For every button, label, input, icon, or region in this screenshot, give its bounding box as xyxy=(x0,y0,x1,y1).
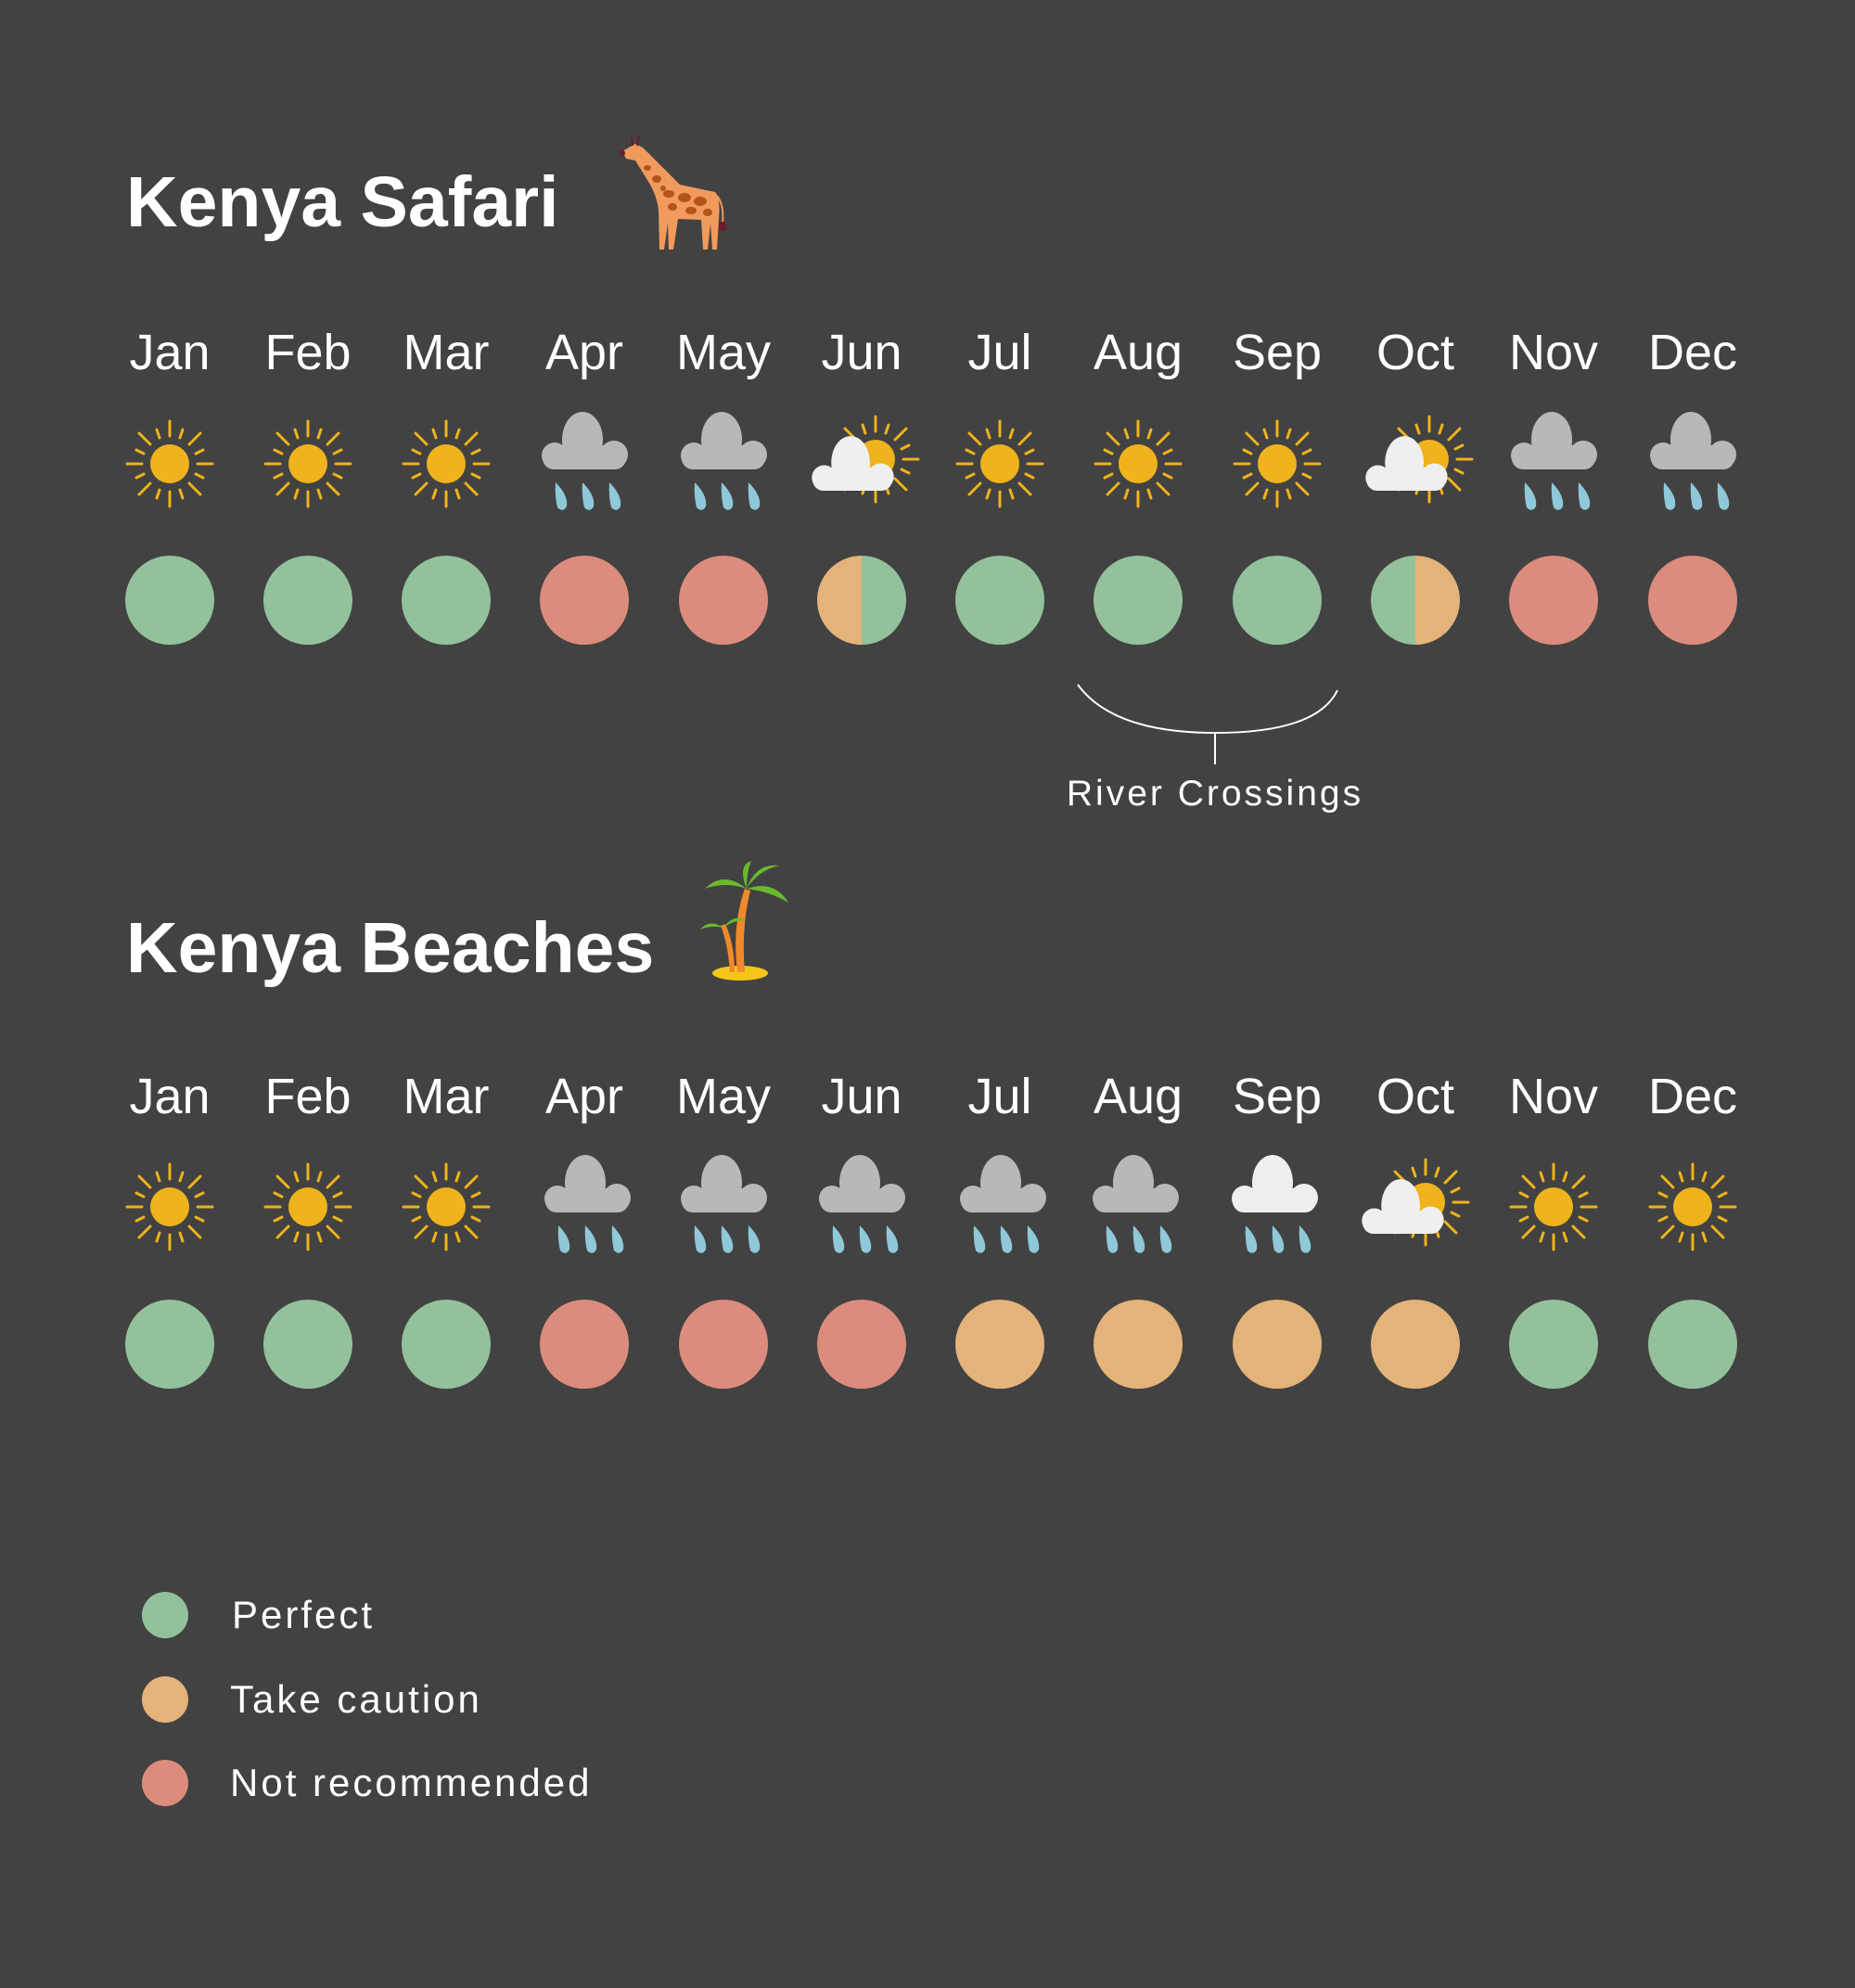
safari month labels: Aug xyxy=(1094,325,1183,380)
beaches month labels xyxy=(129,1069,1737,1124)
beaches month labels: Nov xyxy=(1509,1069,1598,1124)
icon: giraffe xyxy=(620,135,726,250)
beaches weather icons xyxy=(127,1155,1735,1253)
title: Kenya Safari: Kenya Safari xyxy=(126,162,559,242)
beaches month labels: Sep xyxy=(1233,1069,1322,1124)
safari month labels: Nov xyxy=(1509,325,1598,380)
safari month labels: Apr xyxy=(545,325,623,380)
safari month labels: Mar xyxy=(403,325,490,380)
beaches month labels: Feb xyxy=(264,1069,352,1124)
beaches rating circles xyxy=(125,1300,1737,1389)
safari weather icons xyxy=(127,412,1736,510)
beaches month labels: Dec xyxy=(1648,1069,1737,1124)
icon: palm tree xyxy=(700,861,788,981)
beaches month labels: May xyxy=(676,1069,771,1124)
safari month labels: Dec xyxy=(1648,325,1737,380)
legend: Not recommended xyxy=(230,1761,592,1804)
beaches month labels: Mar xyxy=(403,1069,490,1124)
safari month labels: Jul xyxy=(967,325,1032,380)
safari rating circles xyxy=(125,556,1737,645)
safari month labels: Feb xyxy=(264,325,352,380)
beaches month labels: Jan xyxy=(129,1069,211,1124)
safari month labels: Jan xyxy=(129,325,211,380)
safari month labels: May xyxy=(676,325,771,380)
title: Kenya Beaches: Kenya Beaches xyxy=(126,908,654,988)
beaches month labels: Oct xyxy=(1376,1069,1454,1124)
beaches month labels: Jul xyxy=(967,1069,1032,1124)
safari month labels: Sep xyxy=(1233,325,1322,380)
beaches month labels: Apr xyxy=(545,1069,623,1124)
legend: Take caution xyxy=(230,1677,482,1721)
safari month labels: Oct xyxy=(1376,325,1454,380)
callout: river crossings bracket xyxy=(1067,685,1363,814)
callout: river crossings bracket: River Crossings xyxy=(1067,774,1363,814)
safari month labels xyxy=(129,325,1737,380)
legend: Perfect xyxy=(232,1593,375,1636)
beaches month labels: Aug xyxy=(1094,1069,1183,1124)
beaches month labels: Jun xyxy=(821,1069,902,1124)
legend xyxy=(142,1592,592,1806)
safari month labels: Jun xyxy=(821,325,902,380)
